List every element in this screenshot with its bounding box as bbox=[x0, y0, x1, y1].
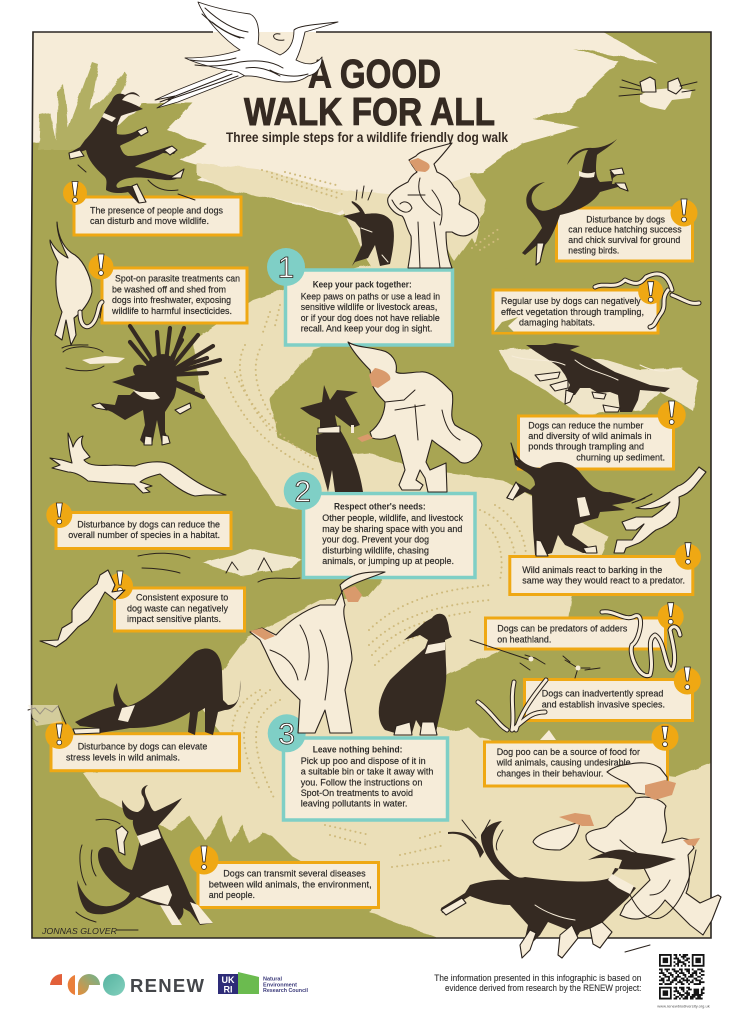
step number badge 2 bbox=[284, 472, 322, 510]
RENEW logo bbox=[50, 974, 205, 996]
icon: warning badge bbox=[88, 254, 114, 280]
illustration: sitting dog bbox=[379, 614, 452, 735]
icon: warning badge bbox=[638, 279, 663, 304]
UKRI NERC logo bbox=[218, 972, 309, 994]
callout: diseases bbox=[190, 846, 378, 908]
illustration: nest with chicks bbox=[619, 77, 697, 110]
QR code bbox=[659, 955, 704, 999]
callout text: dog waste can negatively bbox=[127, 603, 228, 614]
illustration: leaping frog bbox=[40, 553, 300, 647]
stippled path texture bbox=[225, 170, 526, 867]
step 2 text bbox=[322, 501, 463, 567]
callout text: Dog poo can be a source of food for bbox=[497, 747, 641, 758]
callout: ponds bbox=[518, 401, 686, 469]
callout text: Dogs can inadvertently spread bbox=[542, 689, 663, 700]
UKRI NERC logo: RI bbox=[224, 984, 232, 994]
callout text bbox=[209, 869, 372, 901]
step 3 text: Spot-On treatments to avoid bbox=[301, 788, 413, 799]
illustration: fleeing hare bbox=[614, 467, 706, 553]
illustration: barking dog bbox=[506, 443, 636, 556]
illustration: heron bbox=[50, 222, 125, 371]
illustration: leaping dog top left bbox=[69, 92, 195, 203]
icon: warning badge bbox=[190, 846, 218, 874]
step 1 text: or if your dog does not have reliable bbox=[301, 313, 440, 324]
panel: step 3 bbox=[268, 714, 448, 820]
step 1 text: sensitive wildlife or livestock areas, bbox=[301, 302, 437, 313]
step 3 text bbox=[301, 744, 433, 810]
illustration: running dog bbox=[441, 820, 676, 958]
step 2 text: Other people, wildlife, and livestock bbox=[322, 513, 463, 524]
UKRI NERC logo: UK bbox=[222, 975, 235, 985]
callout text: be washed off and shed from bbox=[112, 284, 226, 296]
footer source text: evidence derived from research by the RENEW project: bbox=[445, 983, 641, 994]
illustration: shaking dog with spiky fur bbox=[90, 326, 220, 445]
callout text: Dogs can reduce the number bbox=[528, 420, 644, 431]
callout: stress bbox=[45, 721, 239, 771]
illustration: dog in pond bbox=[512, 343, 682, 412]
callout: dog waste bbox=[107, 571, 244, 631]
callout text: Disturbance by dogs bbox=[586, 215, 665, 226]
step 2 text: your dog. Prevent your dog bbox=[322, 535, 429, 546]
callout text: Disturbance by dogs can elevate bbox=[78, 742, 207, 753]
step 1 text: recall. And keep your dog in sight. bbox=[301, 324, 432, 335]
illustration: flying crane bbox=[155, 2, 338, 108]
callout text bbox=[528, 420, 665, 463]
callout text: Dogs can be predators of adders bbox=[497, 624, 627, 635]
step 3 text: Leave nothing behind: bbox=[313, 744, 402, 755]
RENEW logo: RENEW bbox=[130, 975, 205, 996]
callout text: can reduce hatching success bbox=[568, 224, 682, 236]
illustration: black dog with person one bbox=[343, 186, 394, 266]
callout text: between wild animals, the environment, bbox=[209, 879, 372, 890]
subtitle: Three simple steps for a wildlife friendly dog walk bbox=[226, 130, 508, 145]
step 3 text: you. Follow the instructions on bbox=[301, 777, 422, 788]
UKRI NERC logo: Environment bbox=[263, 982, 297, 988]
callout: presence bbox=[63, 181, 241, 235]
illustration: scratching dog bbox=[76, 785, 213, 925]
illustration: invasive plant bbox=[478, 680, 556, 740]
callout text: nesting birds. bbox=[568, 246, 619, 257]
icon: warning badge bbox=[652, 724, 678, 751]
step 3 text: Pick up poo and dispose of it in bbox=[301, 756, 426, 767]
callout text bbox=[501, 296, 644, 329]
callout: barking bbox=[510, 543, 701, 594]
panel: step 1 bbox=[267, 248, 452, 345]
illustration: person five walking bbox=[533, 763, 721, 935]
panel: step 2 bbox=[284, 472, 475, 578]
callout text: stress levels in wild animals. bbox=[66, 752, 180, 763]
step 2 text: animals, or jumping up at people. bbox=[322, 556, 454, 567]
callout text: and chick survival for ground bbox=[568, 235, 680, 246]
icon: warning badge bbox=[675, 543, 701, 570]
illustration: stoat bbox=[50, 433, 226, 496]
callout: vegetation bbox=[493, 279, 663, 333]
step 1 text: Keep paws on paths or use a lead in bbox=[301, 291, 440, 302]
UKRI NERC logo: Natural bbox=[263, 976, 283, 982]
step number badge 1: 1 bbox=[278, 252, 294, 284]
step number badge 3: 3 bbox=[278, 718, 295, 751]
callout text: Disturbance by dogs can reduce the bbox=[77, 519, 220, 530]
callout: invasive bbox=[524, 667, 701, 720]
QR caption: www.renewbiodiversity.org.uk bbox=[657, 1004, 710, 1008]
callout text bbox=[522, 565, 685, 587]
callout text: on heathland. bbox=[497, 634, 551, 645]
step number badge 2: 2 bbox=[294, 476, 311, 508]
icon: warning badge bbox=[658, 401, 686, 429]
illustration: adder bbox=[602, 612, 680, 676]
illustration: bowing dog bbox=[28, 649, 240, 735]
callout text bbox=[496, 747, 641, 779]
callout text: impact sensitive plants. bbox=[127, 614, 221, 625]
callout text: Consistent exposure to bbox=[136, 593, 228, 604]
callout text: and diversity of wild animals in bbox=[528, 431, 652, 442]
step number badge 3 bbox=[268, 714, 306, 752]
callout text bbox=[542, 689, 665, 710]
icon: warning badge bbox=[63, 181, 87, 205]
callout text bbox=[127, 593, 228, 625]
icon: warning badge bbox=[670, 199, 698, 226]
illustration: spiders bbox=[470, 640, 600, 678]
footer source text bbox=[434, 973, 641, 994]
callout text: Spot-on parasite treatments can bbox=[115, 274, 240, 285]
step 2 text: Respect other's needs: bbox=[334, 501, 426, 512]
callout text: wild animals, causing undesirable bbox=[496, 758, 631, 769]
step 3 text: a suitable bin or take it away with bbox=[301, 767, 433, 778]
icon: warning badge bbox=[46, 502, 72, 528]
callout text: The presence of people and dogs bbox=[90, 206, 223, 216]
callout text: and people. bbox=[209, 890, 255, 901]
callout text bbox=[497, 624, 627, 645]
icon: warning badge bbox=[107, 571, 133, 599]
callout text: overall number of species in a habitat. bbox=[68, 530, 220, 541]
callout text: wildlife to harmful insecticides. bbox=[111, 306, 232, 317]
icon: warning badge bbox=[658, 603, 684, 630]
callout text: Regular use by dogs can negatively bbox=[501, 296, 641, 307]
illustration: person one in white suit bbox=[388, 143, 479, 268]
callout text bbox=[66, 742, 207, 763]
title bbox=[244, 52, 495, 134]
step 1 text bbox=[301, 280, 440, 335]
illustration: roots and worm bbox=[595, 274, 699, 327]
step 3 text: leaving pollutants in water. bbox=[301, 799, 407, 810]
callout: spot-on bbox=[88, 254, 247, 323]
callout: adders bbox=[486, 603, 684, 649]
callout text: changes in their behaviour. bbox=[497, 768, 603, 779]
illustration: dog beside person two bbox=[300, 385, 363, 492]
callout text: effect vegetation through trampling, bbox=[501, 307, 644, 318]
icon: warning badge bbox=[45, 721, 73, 749]
title: WALK FOR ALL bbox=[244, 91, 495, 134]
callout text: and establish invasive species. bbox=[542, 699, 665, 710]
step 2 text: may be sharing space with you and bbox=[322, 524, 462, 535]
callout text bbox=[111, 274, 240, 317]
title: A GOOD bbox=[308, 52, 441, 96]
callout text bbox=[68, 519, 220, 541]
UKRI NERC logo: Research Council bbox=[263, 988, 309, 994]
callout text: Dogs can transmit several diseases bbox=[223, 869, 366, 880]
callout: species bbox=[46, 502, 231, 548]
callout: dog poo bbox=[484, 724, 678, 786]
illustration: leaping dog top right bbox=[522, 139, 628, 265]
callout: hatching bbox=[556, 199, 698, 261]
callout text: ponds through trampling and bbox=[528, 442, 644, 453]
illustration: person three with map bbox=[250, 572, 385, 733]
callout text: dogs into freshwater, exposing bbox=[112, 295, 231, 306]
step number badge 1 bbox=[267, 248, 305, 286]
callout text: churning up sediment. bbox=[576, 452, 665, 463]
callout text: same way they would react to a predator. bbox=[522, 576, 685, 587]
icon: warning badge bbox=[674, 667, 701, 694]
callout text: Wild animals react to barking in the bbox=[522, 565, 662, 576]
callout text bbox=[568, 215, 682, 257]
callout text: damaging habitats. bbox=[519, 318, 595, 329]
step 2 text: disturbing wildlife, chasing bbox=[322, 545, 429, 556]
step 1 text: Keep your pack together: bbox=[313, 280, 412, 291]
illustration: person two in white suit bbox=[348, 342, 482, 492]
callout text: can disturb and move wildlife. bbox=[90, 216, 209, 227]
footer source text: The information presented in this infographic is based on bbox=[434, 973, 641, 984]
callout text bbox=[90, 206, 223, 227]
signature: JONNAS GLOVER bbox=[41, 926, 117, 936]
